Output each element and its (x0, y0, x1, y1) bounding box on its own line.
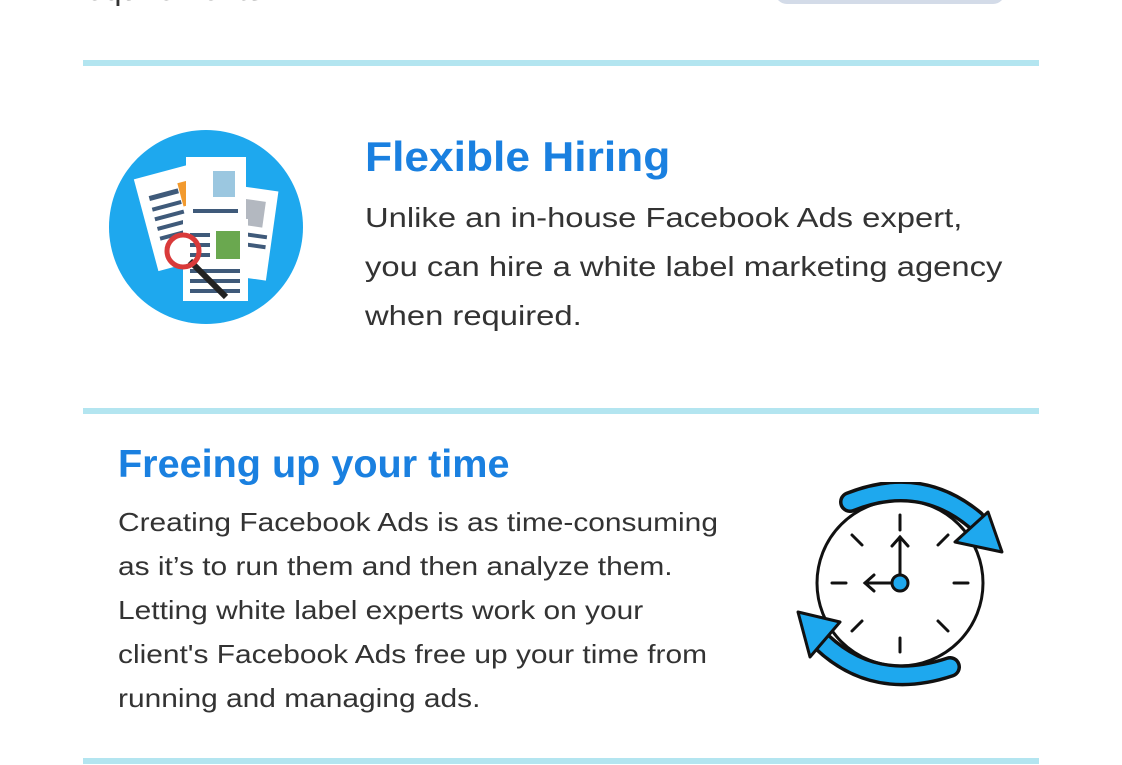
icon: clock with circular arrows (796, 482, 1004, 686)
body text: you can hire a white label marketing agency (365, 251, 1002, 282)
heading: Flexible Hiring: Flexible Hiring (365, 133, 670, 180)
body text: Creating Facebook Ads is as time-consuming (118, 507, 718, 537)
panel: freeing up your time (118, 443, 1004, 713)
body text: Unlike an in-house Facebook Ads expert, (365, 202, 962, 233)
body text (365, 202, 1002, 331)
body text: Letting white label experts work on your (118, 595, 643, 625)
icon: resumes with magnifier (109, 130, 303, 324)
panel: flexible hiring (109, 130, 1002, 331)
body text: as it’s to run them and then analyze them. (118, 551, 673, 581)
heading: Freeing up your time: Freeing up your time (118, 443, 510, 486)
body text: running and managing ads. (118, 683, 480, 713)
body text: when required. (365, 300, 582, 331)
previous section button fragment (775, 0, 1005, 4)
body text (118, 507, 718, 713)
body text: client's Facebook Ads free up your time from (118, 639, 707, 669)
